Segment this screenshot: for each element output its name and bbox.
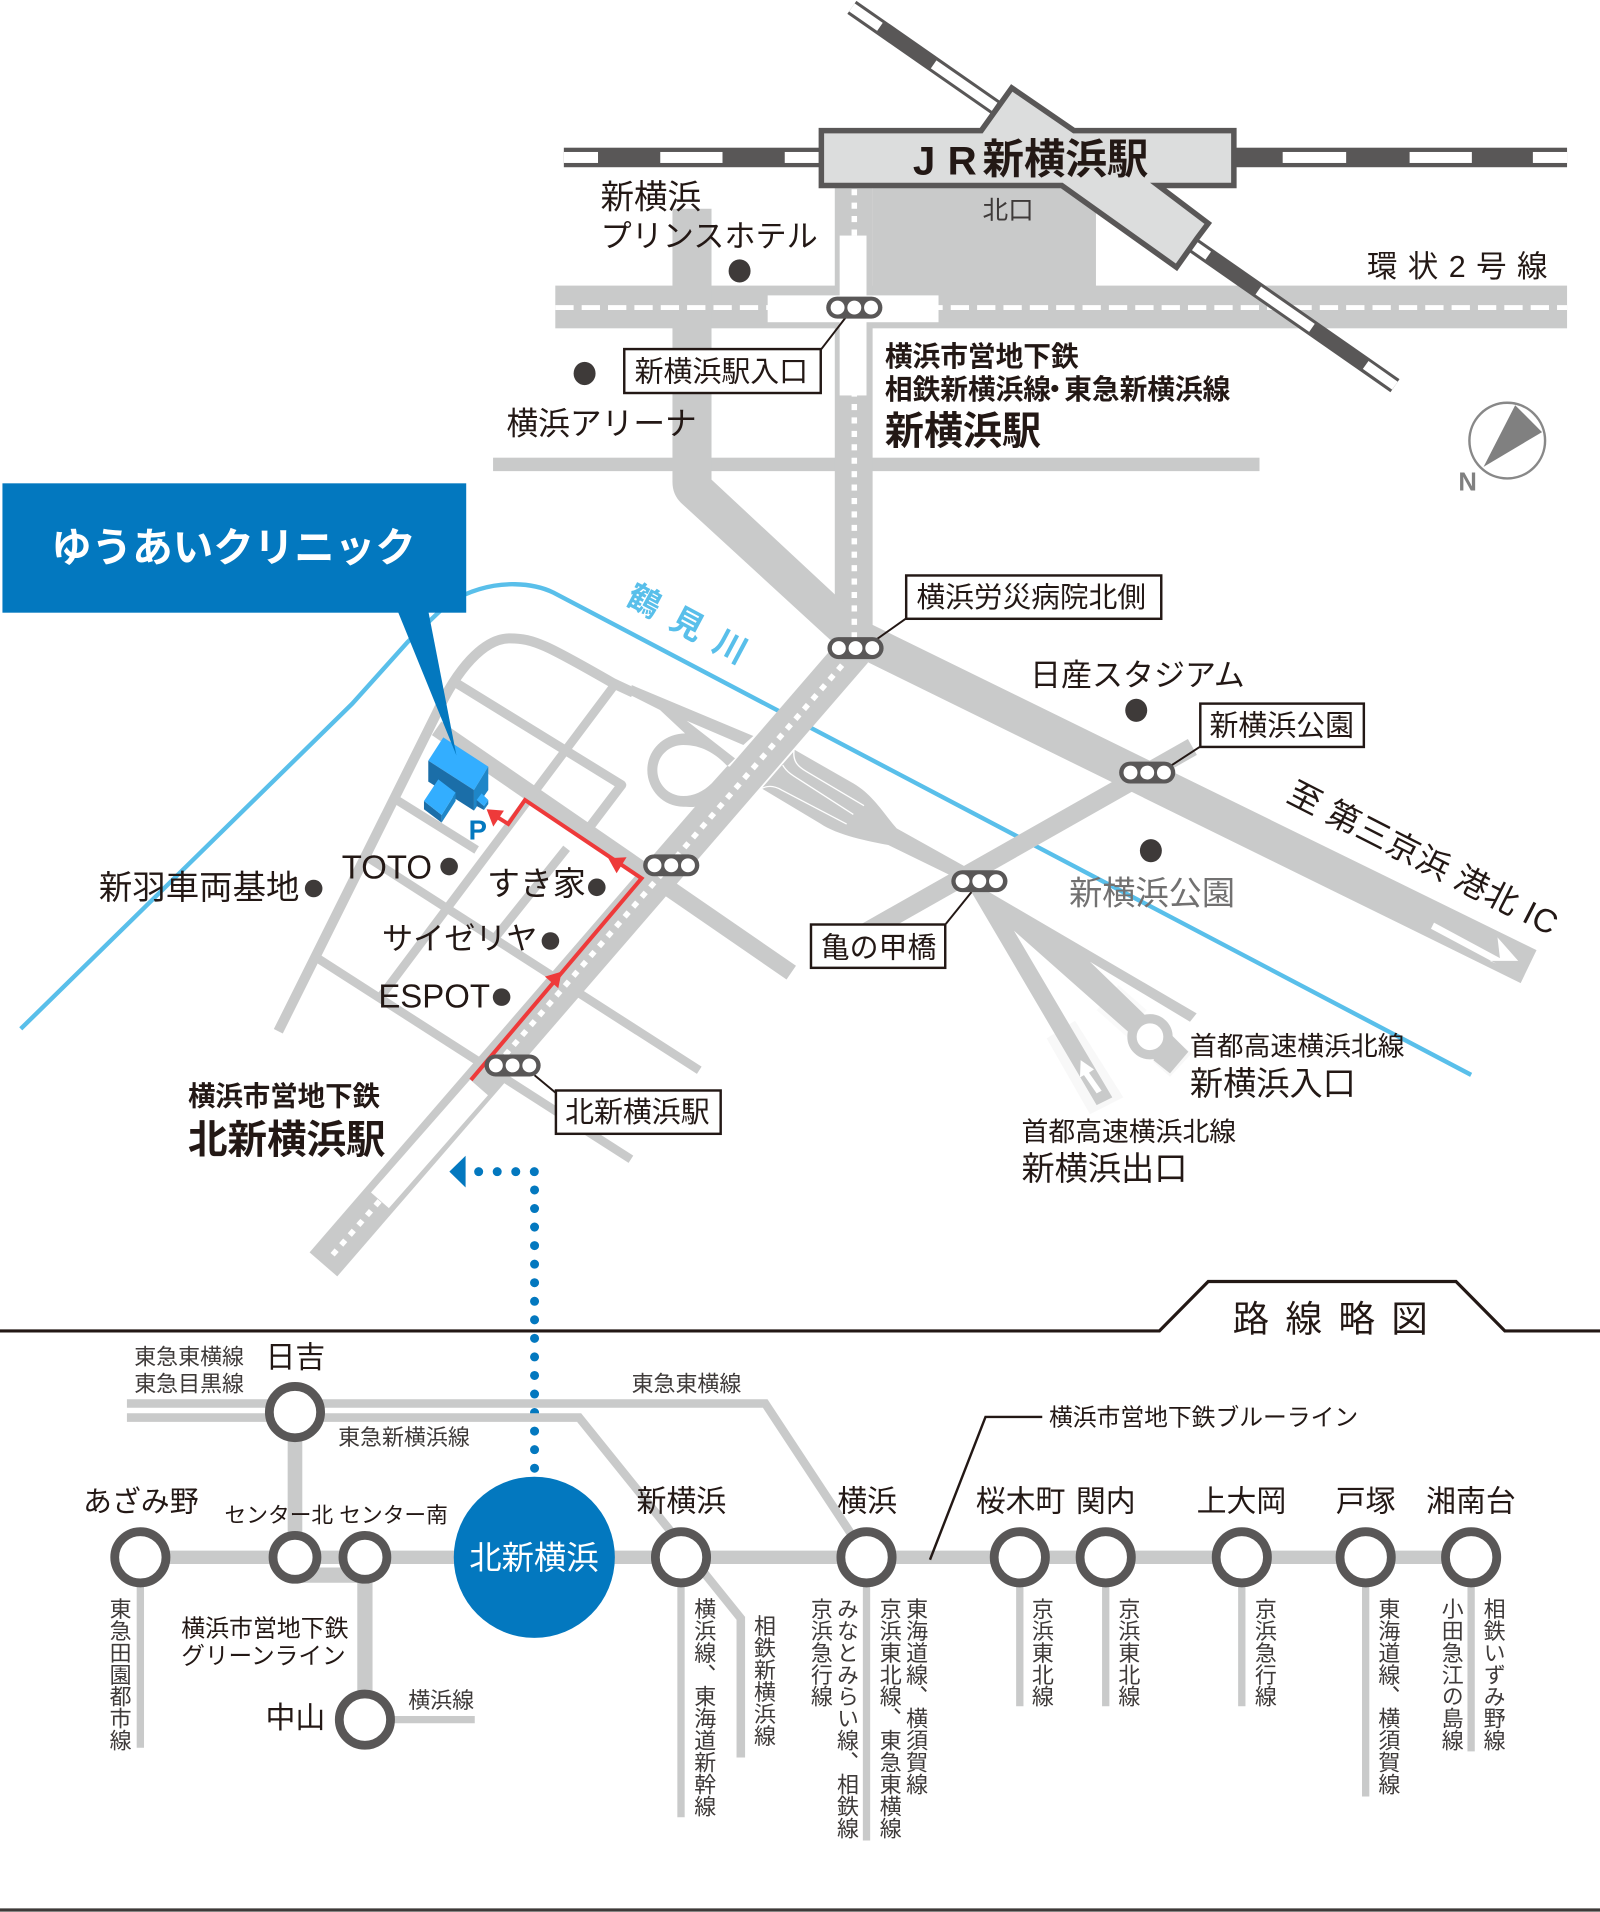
roads: expressway ramps — [968, 873, 1197, 1114]
label: expressway entrance: 首都高速横浜北線 — [1190, 1032, 1405, 1062]
horizontal line names — [134, 1344, 741, 1713]
station names: 日吉 — [265, 1342, 325, 1375]
roads: loop ramp west of avenue — [632, 685, 753, 807]
signal with label: Kamenoko Bridge — [811, 870, 1007, 968]
signal with label: Rosai Hospital north: 横浜労災病院北側 — [917, 582, 1146, 614]
label: Prince Hotel: 新横浜 — [600, 179, 701, 217]
vertical line names: 京浜急行線 — [808, 1598, 833, 1708]
label: Ring Road 2: 環状2号線 — [1367, 250, 1548, 284]
JR Shin-Yokohama station building: J — [913, 139, 935, 184]
icon: compass: N — [1458, 469, 1477, 497]
vertical line names: 相鉄新横浜線 — [751, 1615, 776, 1747]
horizontal line names: 東急目黒線 — [134, 1371, 244, 1396]
label: subway Shin-Yokohama station: 東急新横浜線 — [1064, 374, 1231, 405]
roads: neighbourhood streets — [278, 638, 791, 1159]
JR Shin-Yokohama station building — [821, 88, 1234, 267]
label: Shin-Yokohama Park: 新横浜公園 — [1069, 875, 1235, 912]
station names: あざみ野 — [83, 1487, 199, 1519]
label: subway Kita-Shin-Yokohama station: 横浜市営地下鉄 — [188, 1081, 381, 1112]
station rings — [115, 1386, 1497, 1745]
label: north exit: 北口 — [982, 197, 1034, 225]
landmark dots — [305, 259, 1162, 1006]
transit lines — [127, 1404, 1471, 1840]
station names: 湘南台 — [1426, 1486, 1516, 1519]
vertical line names: 相鉄いずみ野線 — [1481, 1598, 1506, 1752]
station names: 中山 — [265, 1702, 325, 1735]
station names: 桜木町 — [976, 1486, 1065, 1519]
station names: 関内 — [1076, 1486, 1136, 1519]
label: TOTO: TOTO — [342, 849, 432, 886]
horizontal line names: 東急新横浜線 — [338, 1425, 470, 1450]
label: expressway exit — [1022, 1117, 1236, 1188]
JR railway: diagonal track — [852, 7, 1395, 386]
label: Saizeriya: サイゼリヤ — [382, 922, 538, 957]
label: Nissan Stadium: 日産スタジアム — [1030, 658, 1245, 693]
vertical line names: 京浜東北線 — [1116, 1598, 1141, 1708]
road: Blue Line avenue — [323, 651, 854, 1264]
label: expressway exit: 首都高速横浜北線 — [1022, 1117, 1236, 1147]
signal with label: Rosai Hospital north — [827, 575, 1161, 659]
road markings — [555, 189, 1567, 964]
panel: route diagram — [0, 1281, 1600, 1910]
label: Tsurumi River: 鶴見川 — [621, 577, 768, 678]
signal: Blue Line avenue crossing — [643, 854, 699, 876]
label: Sukiya: すき家 — [487, 865, 586, 902]
heading: route diagram: 路線略図 — [1233, 1299, 1428, 1340]
station: Kita-Shin-Yokohama highlighted — [454, 1477, 615, 1638]
label: blue line: 横浜市営地下鉄ブルーライン — [1049, 1405, 1358, 1432]
station names: 戸塚 — [1336, 1486, 1396, 1519]
icon: compass — [1458, 403, 1545, 497]
label: to Daisan Keihin Kohoku IC: 至 第三京浜 港北 IC — [1282, 774, 1564, 942]
vertical line names: 京浜東北線、東急東横線 — [877, 1598, 902, 1840]
vertical line names: 京浜急行線 — [1252, 1598, 1277, 1708]
horizontal line names: 東急東横線 — [134, 1344, 244, 1369]
signal with label: Shin-Yokohama station entrance — [624, 297, 882, 393]
signal with label: Kita-Shin-Yokohama station: 北新横浜駅 — [565, 1097, 710, 1129]
roads: main roads — [493, 188, 1567, 983]
label: subway Shin-Yokohama station: 横浜市営地下鉄 — [885, 341, 1079, 372]
label: subway Shin-Yokohama station: 相鉄新横浜線 — [885, 374, 1051, 405]
label: expressway exit: 新横浜出口 — [1022, 1151, 1187, 1188]
label: Green Line: グリーンライン — [181, 1643, 346, 1670]
arrow: red walking route — [471, 800, 642, 1080]
horizontal line names: 横浜線 — [408, 1688, 474, 1713]
label: subway Kita-Shin-Yokohama station: 北新横浜駅 — [188, 1118, 386, 1162]
blue line leader — [930, 1417, 1042, 1560]
label: Shinba depot: 新羽車両基地 — [99, 870, 299, 907]
signal with label: Shin-Yokohama Park — [1119, 704, 1364, 784]
signal with label: Kamenoko Bridge: 亀の甲橋 — [821, 932, 936, 964]
vertical line names: 京浜東北線 — [1029, 1598, 1054, 1708]
label: subway Shin-Yokohama station: ・ — [1041, 374, 1069, 405]
label: ESPOT: ESPOT — [378, 978, 490, 1015]
horizontal line names: 東急東横線 — [632, 1371, 741, 1396]
vertical line names: 東海道線、横須賀線 — [1376, 1598, 1401, 1796]
signal with label: Kita-Shin-Yokohama station — [485, 1054, 721, 1134]
panel: area map — [2, 7, 1567, 1264]
station names: センター北 — [225, 1503, 333, 1528]
tab outline and section rules — [0, 1281, 1600, 1910]
callout: clinic name — [2, 483, 466, 755]
icon: parking P: P — [469, 815, 487, 846]
signal with label: Shin-Yokohama station entrance: 新横浜駅入口 — [635, 356, 808, 388]
icon: clinic building — [424, 737, 488, 823]
station names: センター南 — [339, 1503, 448, 1528]
road: Kamenoko Bridge street — [854, 747, 1192, 939]
label: expressway entrance — [1190, 1032, 1405, 1103]
arrow: dotted link from route map to station — [449, 1156, 535, 1471]
roads: fork east of avenue — [762, 750, 968, 877]
station names: 新横浜 — [636, 1486, 726, 1519]
river: Tsurumi — [21, 584, 1471, 1075]
station: Kita-Shin-Yokohama highlighted: 北新横浜 — [469, 1540, 599, 1576]
label: subway Shin-Yokohama station — [885, 341, 1231, 453]
label: Green Line: 横浜市営地下鉄 — [181, 1616, 349, 1643]
label: Prince Hotel: プリンスホテル — [600, 219, 818, 254]
vertical line names — [107, 1598, 1506, 1840]
station names: 横浜 — [837, 1486, 897, 1519]
label: expressway entrance: 新横浜入口 — [1190, 1066, 1356, 1103]
JR Shin-Yokohama station building: R — [948, 139, 977, 184]
label: subway Shin-Yokohama station: 新横浜駅 — [885, 410, 1041, 453]
label: subway Kita-Shin-Yokohama station — [188, 1081, 386, 1162]
vertical line names: 小田急江の島線 — [1439, 1598, 1464, 1752]
label: Prince Hotel — [600, 179, 818, 254]
callout: clinic name: ゆうあいクリニック — [51, 524, 416, 570]
vertical line names: 東急田園都市線 — [107, 1598, 132, 1752]
station names — [83, 1342, 1516, 1735]
JR Shin-Yokohama station building: 新横浜駅 — [982, 135, 1148, 182]
vertical line names: 東海道線、横須賀線 — [904, 1598, 929, 1796]
label: Yokohama Arena: 横浜アリーナ — [506, 406, 697, 442]
JR railway: horizontal track — [564, 148, 1567, 167]
vertical line names: 横浜線、東海道新幹線 — [692, 1598, 717, 1818]
vertical line names: みなとみらい線、相鉄線 — [834, 1598, 859, 1840]
signal with label: Shin-Yokohama Park: 新横浜公園 — [1209, 710, 1354, 742]
label: Green Line — [181, 1616, 349, 1670]
station names: 上大岡 — [1197, 1486, 1286, 1519]
